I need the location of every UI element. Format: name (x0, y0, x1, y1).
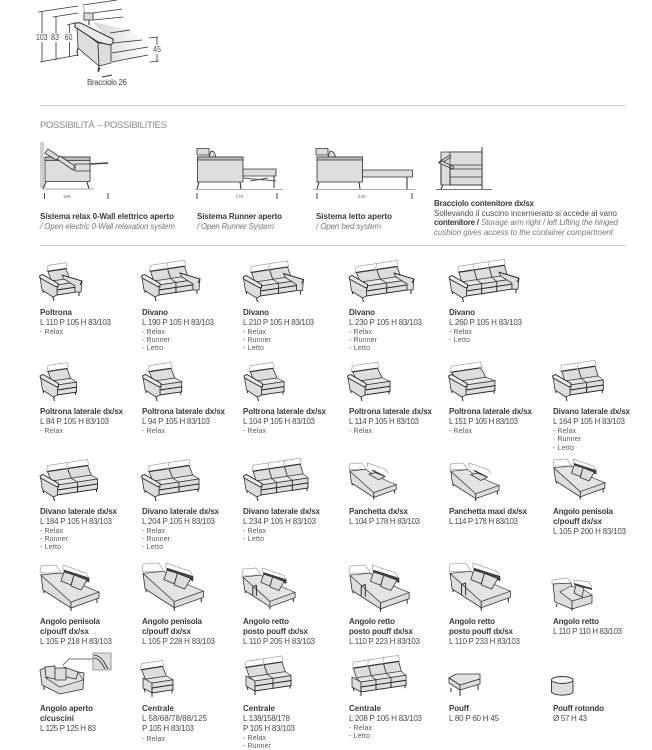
label: Poltrona laterale dx/sx (349, 407, 433, 416)
label: - Letto (142, 345, 163, 352)
label: - Relax (349, 329, 372, 336)
item: Poltrona laterale 84 (40, 361, 124, 435)
label (40, 617, 113, 646)
label: Angolo penisola (40, 617, 101, 626)
item: Angolo retto 205 (242, 568, 316, 646)
sofa arm detail (75, 0, 150, 77)
icon: two seat sofa (349, 259, 414, 302)
label: L 164 P 105 H 83/103 (553, 417, 626, 426)
label: - Relax (142, 736, 166, 743)
inset detail callout (63, 653, 111, 670)
bed diagram: 240 (358, 194, 366, 199)
icon: side armchair (448, 360, 495, 401)
icon: corner chaise (553, 459, 605, 499)
storage arm caption (434, 199, 619, 237)
item: Poltrona (40, 261, 112, 336)
label (142, 617, 216, 646)
label: Angolo retto (349, 617, 395, 626)
label (243, 308, 315, 352)
label: Poltrona (40, 308, 73, 317)
label: L 110 P 110 H 83/103 (553, 627, 623, 636)
storage arm caption: contenitore / (434, 218, 480, 227)
label (243, 507, 321, 543)
label: L 80 P 60 H 45 (449, 714, 500, 723)
item: Angolo aperto (40, 653, 111, 733)
label: L 104 P 105 H 83/103 (243, 417, 316, 426)
icon: side armchair (348, 360, 390, 401)
label: - Relax (142, 329, 166, 336)
label: - Relax (349, 725, 372, 732)
label: Angolo aperto (40, 704, 93, 713)
item: Angolo retto 233 (449, 563, 521, 646)
label: L 260 P 105 H 83/103 (449, 318, 523, 327)
panel: relax system (39, 142, 175, 231)
label: posto pouff dx/sx (243, 627, 309, 636)
item: Divano laterale 184 (40, 458, 118, 551)
label (349, 617, 421, 646)
label: - Runner (553, 436, 582, 443)
label: - Letto (142, 544, 163, 551)
relax caption: Sistema relax 0-Wall elettrico aperto (40, 212, 174, 221)
item: Pouff rotondo (551, 676, 604, 723)
height dimension lines (38, 6, 159, 62)
dimension drawing (35, 0, 162, 87)
label: - Relax (142, 528, 166, 535)
label (142, 507, 220, 551)
label: Poltrona laterale dx/sx (243, 407, 327, 416)
icon: corner seat (552, 578, 592, 611)
label: L 110 P 105 H 83/103 (40, 318, 112, 327)
label (449, 407, 533, 435)
label: Angolo retto (553, 617, 599, 626)
height labels: 45 (153, 45, 161, 54)
label: Centrale (349, 704, 382, 713)
label (142, 407, 226, 435)
label: Panchetta maxi dx/sx (449, 507, 528, 516)
icon: pouff (449, 674, 480, 696)
item: Centrale 3 (349, 654, 423, 740)
label: - Runner (40, 536, 69, 543)
label: L 114 P 105 H 83/103 (349, 417, 420, 426)
icon: bench chaise (450, 463, 499, 501)
label (142, 704, 208, 743)
label: - Relax (243, 329, 266, 336)
label: - Relax (243, 735, 266, 742)
label: L 114 P 178 H 83/103 (449, 517, 519, 526)
label: posto pouff dx/sx (349, 627, 414, 636)
label: L 138/158/178 (243, 714, 291, 723)
item: Divano 260 (449, 258, 523, 344)
icon: side sofa (142, 458, 199, 501)
height labels (35, 33, 162, 54)
label (349, 507, 421, 526)
label: Divano (349, 308, 375, 317)
label: - Relax (40, 329, 64, 336)
label: Divano laterale dx/sx (243, 507, 321, 516)
item: Poltrona laterale 151 (448, 360, 533, 435)
label: Angolo retto (449, 617, 495, 626)
item: Divano 230 (349, 259, 423, 352)
icon: square corner with pouff seat (449, 563, 510, 611)
label: L 208 P 105 H 83/103 (349, 714, 423, 723)
label: - Relax (142, 428, 166, 435)
label: Divano (142, 308, 168, 317)
item: Divano laterale 234 (243, 457, 321, 543)
label: Centrale (142, 704, 175, 713)
label: P 105 H 83/103 (142, 724, 195, 733)
panel: bed system (313, 148, 415, 231)
section heading: POSSIBILITÀ – POSSIBILITIES (40, 120, 167, 131)
item: Poltrona laterale 114 (348, 360, 433, 435)
label (40, 308, 112, 336)
bed caption: / Open bed system (315, 222, 381, 231)
label (449, 704, 500, 723)
label: P 105 H 83/103 (243, 724, 296, 733)
label: L 105 P 228 H 83/103 (142, 637, 216, 646)
item: Pouff (449, 674, 500, 723)
label: Divano laterale dx/sx (40, 507, 118, 516)
label: Poltrona laterale dx/sx (40, 407, 124, 416)
bed caption (315, 212, 392, 231)
icon: armchair (40, 261, 82, 301)
item: Angolo penisola 200 (553, 459, 627, 536)
runner caption: / Open Runner System (196, 222, 274, 231)
label: L 58/68/78/88/125 (142, 714, 208, 723)
item: Panchetta maxi (449, 463, 528, 526)
icon: side three seat sofa (244, 457, 308, 501)
storage arm caption: cushion gives access to the container compartment (434, 228, 614, 237)
label: L 151 P 105 H 83/103 (449, 417, 519, 426)
label: Poltrona laterale dx/sx (142, 407, 226, 416)
item: Divano laterale 204 (142, 458, 220, 551)
label (243, 704, 296, 750)
icon: side armchair (40, 361, 77, 401)
label: Pouff (449, 704, 469, 713)
label: L 104 P 178 H 83/103 (349, 517, 421, 526)
bed caption: Sistema letto aperto (316, 212, 392, 221)
armrest label: Bracciolo 26 (87, 78, 128, 87)
item: Angolo penisola 218 (40, 565, 113, 646)
label: - Letto (553, 445, 574, 452)
label (40, 507, 118, 551)
label: c/pouff dx/sx (553, 517, 603, 526)
label (449, 507, 528, 526)
label (349, 704, 423, 740)
icon: two seat sofa (243, 260, 304, 302)
item: Centrale 1 (140, 659, 208, 743)
label: L 204 P 105 H 83/103 (142, 517, 216, 526)
height labels: 103 (36, 33, 48, 42)
item: Poltrona laterale 94 (142, 361, 226, 435)
label: - Runner (243, 337, 272, 344)
label: L 184 P 105 H 83/103 (40, 517, 113, 526)
relax caption (39, 212, 175, 231)
label (349, 308, 423, 352)
label (40, 704, 97, 733)
label: - Relax (243, 428, 266, 435)
storage arm caption: Sollevando il cuscino incernierato si accede al vano (434, 209, 618, 218)
label: - Letto (349, 345, 370, 352)
label: - Runner (243, 743, 272, 750)
runner diagram: 178 (236, 194, 244, 199)
icon: corner chaise (142, 563, 203, 611)
icon: three seat sofa (449, 258, 519, 302)
item: Divano 210 (243, 260, 315, 352)
label: Centrale (243, 704, 276, 713)
height labels: 83 (51, 33, 59, 42)
label (553, 617, 623, 636)
relax caption: / Open electric 0-Wall relaxation system (39, 222, 175, 231)
label: - Runner (349, 337, 378, 344)
icon: round pouff (551, 676, 573, 695)
icon: open corner with cushions (40, 666, 84, 694)
label: - Relax (40, 528, 64, 535)
label: Poltrona laterale dx/sx (449, 407, 533, 416)
label: Angolo retto (243, 617, 289, 626)
label (40, 407, 124, 435)
icon: square corner with pouff seat (242, 568, 295, 609)
item: Divano 190 (142, 259, 215, 352)
label: - Letto (349, 733, 370, 740)
item: Angolo retto 110 (552, 578, 623, 636)
label: - Relax (449, 428, 472, 435)
icon: side sofa (40, 458, 98, 501)
label: - Relax (243, 528, 266, 535)
icon: side armchair (142, 361, 182, 401)
item: Poltrona laterale 104 (243, 361, 327, 435)
icon: side sofa (552, 359, 603, 401)
panel: storage arm (434, 147, 619, 237)
item: Panchetta (349, 463, 421, 526)
label (349, 407, 433, 435)
icon: single central seat (140, 659, 173, 697)
item: Centrale 2 (243, 655, 296, 750)
label: L 125 P 125 H 83 (40, 724, 97, 733)
item: Divano laterale 164 (552, 359, 631, 452)
icon: side armchair (244, 361, 284, 401)
label: Divano (449, 308, 475, 317)
relax diagram: 155 (63, 194, 71, 199)
label (243, 617, 316, 646)
label (553, 407, 631, 452)
label: L 230 P 105 H 83/103 (349, 318, 423, 327)
label: L 234 P 105 H 83/103 (243, 517, 317, 526)
icon: square corner with pouff seat (349, 565, 409, 612)
label (553, 507, 627, 536)
label: Angolo penisola (142, 617, 203, 626)
item: Angolo penisola 228 (142, 563, 216, 646)
label: Pouff rotondo (553, 704, 604, 713)
label: - Letto (243, 345, 264, 352)
label: - Letto (243, 536, 264, 543)
label: - Relax (349, 428, 372, 435)
label (243, 407, 327, 435)
label: - Runner (142, 536, 171, 543)
label: L 84 P 105 H 83/103 (40, 417, 110, 426)
icon: bench chaise (349, 463, 396, 500)
label: c/cuscini (40, 714, 74, 723)
label: posto pouff dx/sx (449, 627, 514, 636)
label: Divano laterale dx/sx (553, 407, 631, 416)
storage arm caption: Storage arm right / left Lifting the hinged (481, 218, 619, 227)
icon: two seat central (245, 655, 291, 695)
label: L 105 P 200 H 83/103 (553, 527, 627, 536)
panel: runner system (195, 148, 283, 231)
label (449, 308, 523, 344)
label: Divano (243, 308, 269, 317)
label: L 110 P 233 H 83/103 (449, 637, 521, 646)
label (553, 704, 604, 723)
storage arm diagram (436, 147, 492, 190)
label (449, 617, 521, 646)
icon: three seat central (352, 654, 406, 696)
label: L 105 P 218 H 83/103 (40, 637, 113, 646)
label: Divano laterale dx/sx (142, 507, 220, 516)
label: L 210 P 105 H 83/103 (243, 318, 315, 327)
runner caption: Sistema Runner aperto (197, 212, 282, 221)
label: Angolo penisola (553, 507, 614, 516)
label: - Relax (553, 428, 576, 435)
label: - Runner (142, 337, 171, 344)
label: - Relax (40, 428, 64, 435)
label: c/pouff dx/sx (40, 627, 90, 636)
icon: corner chaise (40, 565, 99, 611)
icon: two seat sofa (142, 259, 200, 301)
label: Panchetta dx/sx (349, 507, 409, 516)
label: - Letto (449, 337, 470, 344)
label: - Relax (449, 329, 472, 336)
runner caption (196, 212, 282, 231)
label: Ø 57 H 43 (553, 714, 588, 723)
label: L 110 P 223 H 83/103 (349, 637, 421, 646)
item: Angolo retto 223 (349, 565, 421, 646)
label: L 110 P 205 H 83/103 (243, 637, 316, 646)
label: L 190 P 105 H 83/103 (142, 318, 215, 327)
label: c/pouff dx/sx (142, 627, 192, 636)
label: L 94 P 105 H 83/103 (142, 417, 211, 426)
storage arm caption: Bracciolo contenitore dx/sx (434, 199, 535, 208)
label: - Letto (40, 544, 61, 551)
label (142, 308, 215, 352)
height labels: 60 (64, 33, 73, 42)
